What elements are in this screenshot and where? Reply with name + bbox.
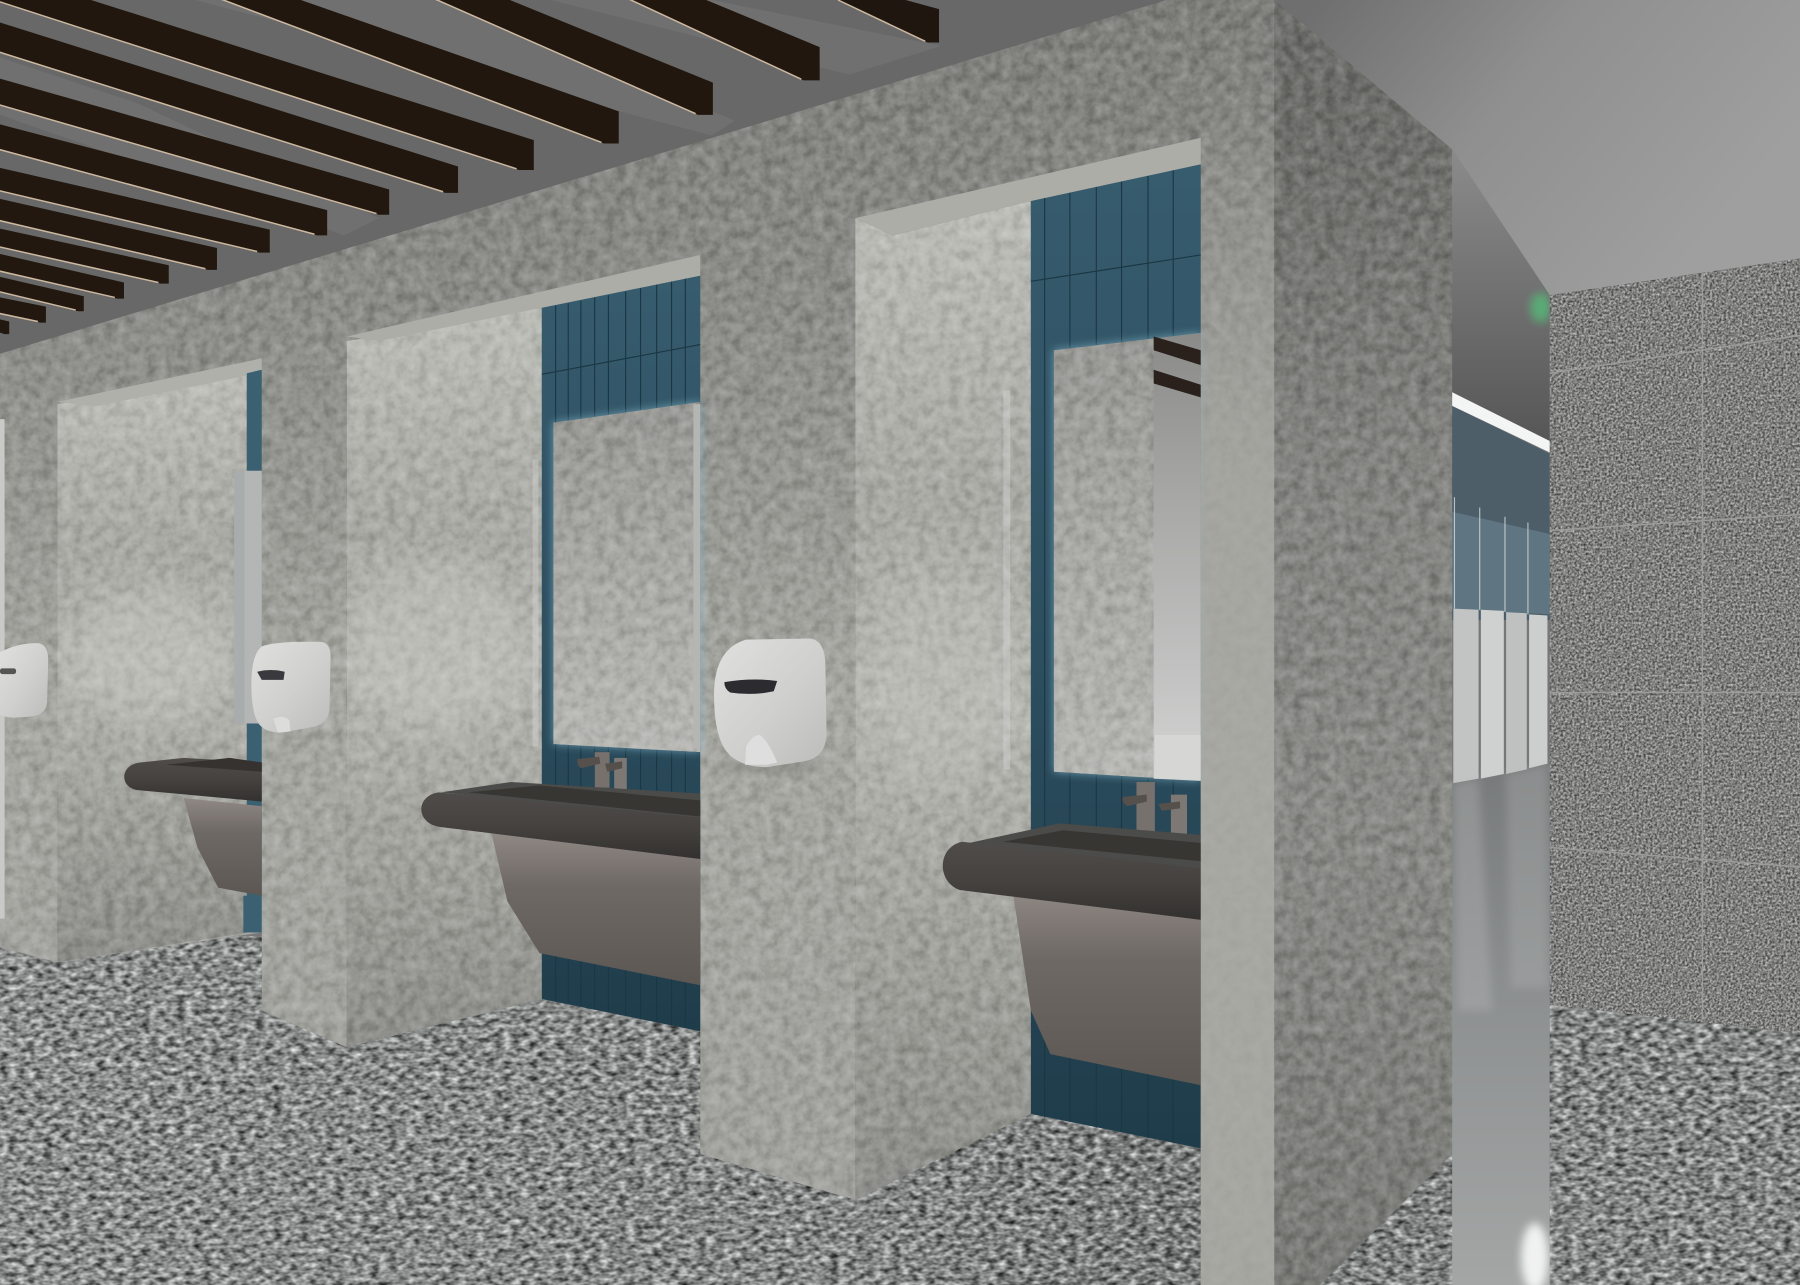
wooden ceiling beams	[0, 0, 939, 334]
middle sink rim	[421, 792, 700, 859]
mirror reflection of room	[1154, 333, 1201, 781]
lit pillar side highlights	[75, 557, 1010, 792]
far niche	[57, 358, 262, 962]
middle sink under panel	[491, 833, 700, 985]
front column	[1201, 0, 1452, 1285]
floor reflections	[1453, 779, 1492, 1011]
stone wall and pillars	[0, 0, 1274, 1285]
terrazzo floor	[0, 936, 1452, 1285]
glass partition panel	[1449, 511, 1550, 614]
middle sink ledge	[441, 782, 700, 821]
near soffit	[855, 138, 1201, 235]
near sink rim	[943, 842, 1201, 920]
hand dryer: left	[0, 643, 48, 718]
corridor	[1449, 144, 1551, 1285]
far niche tile	[243, 370, 262, 932]
partition posts	[1454, 497, 1528, 614]
near sink under panel	[1012, 890, 1201, 1085]
floor wedge beside column	[1320, 1154, 1452, 1285]
far niche soffit	[57, 358, 262, 407]
green exit glow	[1530, 293, 1551, 323]
middle mirror	[553, 402, 700, 752]
far mirror edge	[234, 471, 262, 723]
hand dryer: middle	[251, 642, 331, 740]
middle wall tile	[542, 276, 700, 1031]
dryer nozzle	[745, 735, 777, 765]
middle soffit	[347, 255, 700, 341]
far pillar lit face	[57, 373, 247, 962]
far sink rim	[124, 758, 262, 802]
cubicle doors	[1453, 609, 1547, 783]
near pillar lit face	[855, 201, 1031, 1200]
near mirror glow	[1054, 333, 1201, 781]
right ceiling	[1263, 0, 1800, 295]
far sink under panel	[184, 798, 262, 896]
floor light reflection	[1521, 1223, 1549, 1285]
ceiling panel bands	[0, 0, 941, 235]
right floor	[1550, 1005, 1800, 1285]
near faucets	[1123, 782, 1187, 837]
near wall tile	[1031, 164, 1201, 1148]
middle niche	[347, 255, 700, 1047]
right tiled wall	[1550, 258, 1800, 1034]
corridor back wall	[1449, 404, 1550, 620]
middle faucets	[577, 752, 627, 790]
ceiling	[0, 0, 1378, 390]
column side face	[1201, 69, 1274, 1285]
beam light strips	[0, 0, 925, 322]
hand dryer: near	[714, 638, 827, 774]
middle pillar lit face	[347, 308, 542, 1047]
far left sliver	[0, 419, 5, 919]
corridor ceiling	[1449, 144, 1550, 448]
corridor floor	[1449, 758, 1550, 1285]
ceiling light strip	[1449, 390, 1550, 452]
mirror light streaks on pillars	[533, 390, 1010, 769]
near sink basin	[1003, 830, 1201, 861]
dryer display	[724, 679, 777, 694]
near sink ledge	[964, 823, 1201, 869]
middle sink basin	[468, 785, 700, 816]
near mirror	[1054, 333, 1201, 781]
near niche	[855, 138, 1201, 1200]
middle mirror glow	[553, 402, 700, 752]
